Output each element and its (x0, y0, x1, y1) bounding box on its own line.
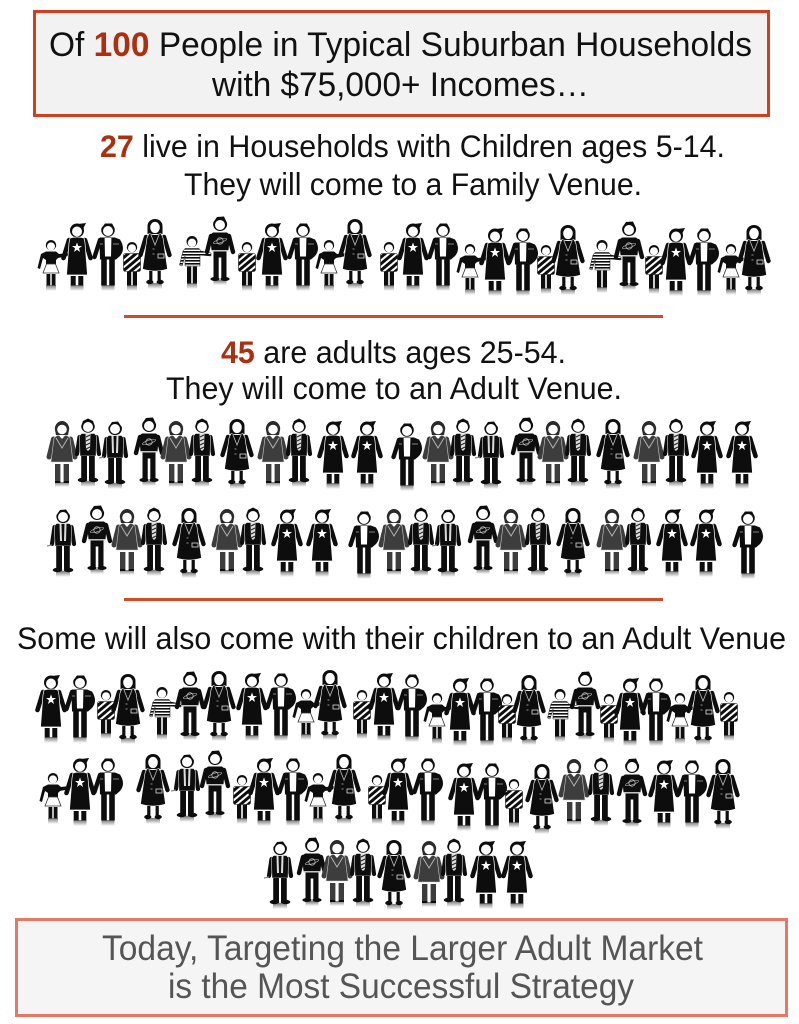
row: adult figures bottom (47, 506, 763, 579)
heading: 45 adult venue: 45 are adults ages 25-54. (221, 334, 566, 370)
row: mixed figures 2 (40, 750, 738, 834)
heading: 45 adult venue (166, 334, 622, 406)
heading: 45 adult venue: They will come to an Adult Venue. (166, 370, 622, 406)
conclusion line 2: is the Most Successful Strategy (168, 967, 634, 1006)
heading: some with children: Some will also come with their children to an Adult Venue (17, 620, 786, 656)
panel: title box (34, 12, 768, 116)
row: adult figures top (49, 418, 756, 491)
row: mixed figures 1 (38, 670, 738, 746)
panel: conclusion box (16, 920, 786, 1016)
row: 27 family figures (38, 216, 768, 296)
title line 1: Of 100 People in Typical Suburban Households (49, 26, 752, 64)
heading: 27 family venue: 27 live in Households with Children ages 5-14. (100, 128, 725, 164)
row: mixed figures 3 (264, 838, 530, 910)
heading: 27 family venue: They will come to a Family Venue. (184, 166, 642, 202)
heading: 27 family venue (100, 128, 725, 202)
conclusion line 1: Today, Targeting the Larger Adult Market (102, 929, 703, 968)
title line 2: with $75,000+ Incomes… (211, 66, 589, 104)
